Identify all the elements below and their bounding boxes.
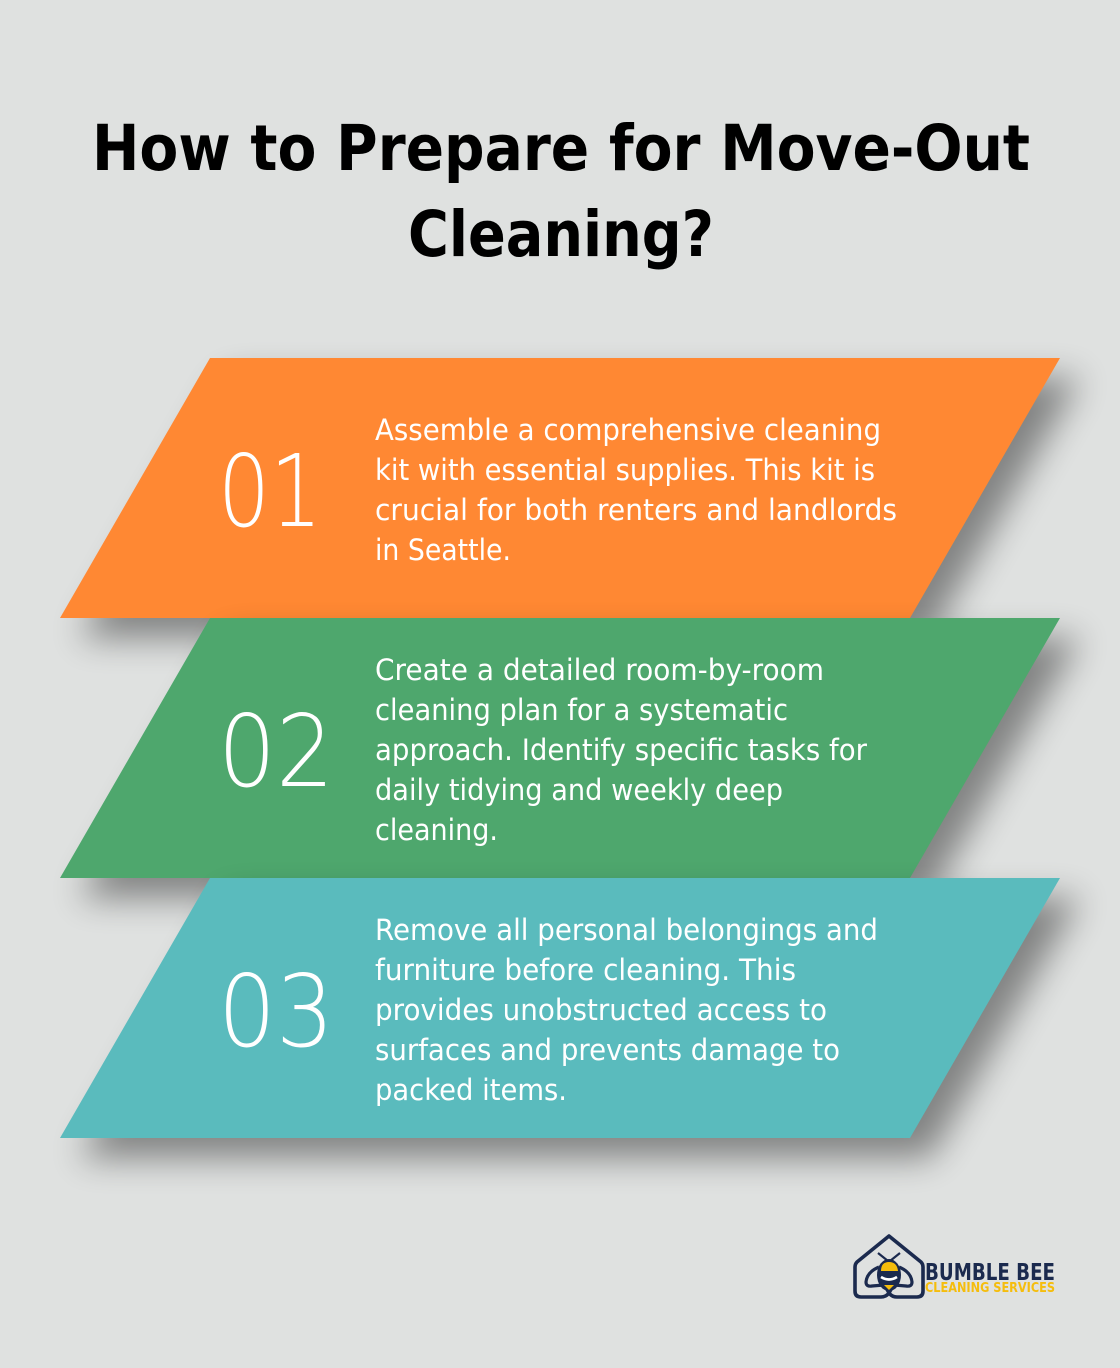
title: How to Prepare for Move-Out [92, 112, 1030, 185]
step 02 text: cleaning plan for a systematic [375, 693, 788, 727]
step 01 text: in Seattle. [375, 533, 511, 567]
panel: step 02 [60, 618, 1060, 878]
step 01 text: Assemble a comprehensive cleaning [375, 413, 881, 447]
step 03 text: surfaces and prevents damage to [375, 1033, 840, 1067]
orange parallelogram [60, 358, 1060, 618]
number 01: 01 [218, 433, 322, 550]
step 03 text [375, 913, 878, 1107]
green parallelogram [60, 618, 1060, 878]
panel: step 01 [60, 358, 1060, 618]
title [92, 112, 1030, 271]
step 03 text: packed items. [375, 1073, 567, 1107]
step 01 text: kit with essential supplies. This kit is [375, 453, 875, 487]
teal parallelogram [60, 878, 1060, 1138]
number 03: 03 [218, 953, 334, 1070]
step 02 text: daily tidying and weekly deep [375, 773, 783, 807]
step 02 text [375, 653, 867, 847]
icon: house with bee [855, 1236, 923, 1297]
step 03 text: provides unobstructed access to [375, 993, 827, 1027]
step 03 text: Remove all personal belongings and [375, 913, 878, 947]
step 03 text: furniture before cleaning. This [375, 953, 796, 987]
step 02 text: approach. Identify specific tasks for [375, 733, 867, 767]
step 02 text: cleaning. [375, 813, 498, 847]
brand tagline: CLEANING SERVICES [925, 1281, 1055, 1296]
brand name: BUMBLE BEE [925, 1260, 1055, 1286]
logo: Bumble Bee Cleaning Services [855, 1236, 1055, 1297]
step 01 text [375, 413, 897, 567]
number 02: 02 [218, 693, 334, 810]
title: Cleaning? [408, 198, 714, 271]
step 01 text: crucial for both renters and landlords [375, 493, 897, 527]
step 02 text: Create a detailed room-by-room [375, 653, 824, 687]
panel: step 03 [60, 878, 1060, 1138]
